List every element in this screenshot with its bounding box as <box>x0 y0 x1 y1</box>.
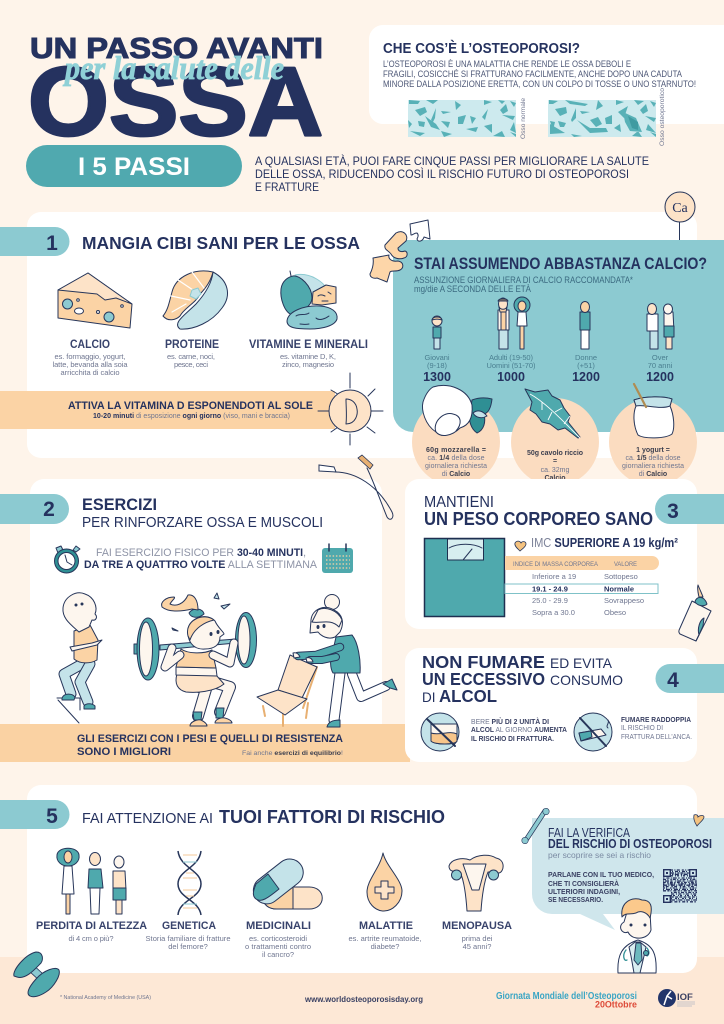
risk factor notes: di 4 cm o più? <box>68 934 114 943</box>
heading: step 3 <box>424 494 653 529</box>
callout: risk check <box>532 818 724 930</box>
calcium food: kale <box>511 389 599 486</box>
intake values: 1200 <box>646 370 674 384</box>
kale fact: = <box>553 458 557 465</box>
BMI table: Sopra a 30.0 <box>532 608 575 617</box>
risk factor notes: 45 anni? <box>463 942 491 951</box>
label: calcio: CALCIO <box>70 339 110 351</box>
intake values: Uomini (51-70) <box>486 361 536 370</box>
intake values <box>423 353 674 384</box>
intake values: Adulti (19-50) <box>489 353 534 362</box>
callout heading: FAI LA VERIFICA <box>548 826 631 840</box>
label: calcio: latte, bevanda alla soia <box>52 360 128 369</box>
icon: calcium circle: Ca <box>672 201 689 216</box>
callout subheading: per scoprire se sei a rischio <box>548 850 651 860</box>
icon: sun with letter D <box>318 373 383 445</box>
BMI table: Obeso <box>604 608 626 617</box>
step number tab 5: 5 <box>46 805 58 828</box>
callout text <box>548 870 654 904</box>
icon: heart <box>515 541 526 551</box>
intake values: (9-18) <box>427 361 448 370</box>
label: proteine: PROTEINE <box>165 339 219 351</box>
icon: blood drop <box>367 853 402 911</box>
panel: step 5 <box>0 785 724 1010</box>
figure: three women shrinking <box>57 848 126 914</box>
label: proteine <box>165 339 219 369</box>
yogurt fact <box>622 447 684 478</box>
risk factor notes: il cancro? <box>262 950 294 959</box>
exercise frequency text: DA TRE A QUATTRO VOLTE ALLA SETTIMANA <box>84 559 318 571</box>
heading: CHE COS’È L’OSTEOPOROSI? <box>383 40 580 57</box>
figure: child <box>432 316 442 349</box>
band: weights and resistance: Fai anche esercizi di equilibrio ! <box>242 750 343 757</box>
label: vitamine e minerali: VITAMINE E MINERALI <box>249 339 368 351</box>
risk factor notes: prima dei <box>462 934 493 943</box>
label: calcio: es. formaggio, yogurt, <box>54 352 126 361</box>
figure: woman lifting barbell <box>134 593 256 726</box>
label: vitamine e minerali <box>249 339 368 369</box>
band: vitamin D: 10-20 minuti di esposizione ogni giorno (viso, mani e braccia) <box>93 413 290 420</box>
icon: calendar <box>322 544 353 573</box>
subheading: recommended intake: mg/die A SECONDA DELLE ETÀ <box>414 284 532 294</box>
definition text <box>383 59 696 89</box>
panel: step 3 <box>405 479 724 629</box>
icon: calcium circle <box>665 192 695 240</box>
kale fact: Calcio <box>544 475 566 482</box>
yogurt fact: giornaliera richiesta <box>622 463 684 470</box>
mozzarella fact: ca. 1/4 della dose <box>428 455 485 462</box>
intro text <box>255 155 649 194</box>
intake values: 70 anni <box>648 361 673 370</box>
BMI table: VALORE <box>614 561 638 568</box>
calcium food: mozzarella <box>412 386 500 486</box>
yogurt fact: 1 yogurt = <box>636 447 670 454</box>
risk factor labels: MALATTIE <box>359 920 413 932</box>
callout text: CHE TI CONSIGLIERÀ <box>548 879 620 888</box>
figure: older woman with chair <box>257 594 397 727</box>
panel: what is osteoporosis <box>369 25 724 137</box>
heading: step 4: UN ECCESSIVO <box>422 669 545 689</box>
heading: step 3: UN PESO CORPOREO SANO <box>424 508 653 529</box>
label: vitamine e minerali: zinco, magnesio <box>282 360 334 369</box>
BMI table: Normale <box>604 584 634 594</box>
heading: step 3: MANTIENI <box>424 494 494 511</box>
QR code <box>663 869 697 903</box>
yogurt fact: di Calcio <box>639 471 667 478</box>
band: vitamin D <box>0 391 335 429</box>
step number tab 1 <box>0 227 70 256</box>
intake values: Donne <box>575 353 597 362</box>
heading: step 2: ESERCIZI <box>82 495 157 514</box>
mozzarella fact: 60g mozzarella = <box>426 447 486 454</box>
banner: I 5 passi: I 5 PASSI <box>78 153 190 181</box>
risk factor notes <box>68 934 493 959</box>
heading: step 4: ED EVITA <box>550 655 613 671</box>
smoking text: FUMARE RADDOPPIA <box>621 717 691 724</box>
panel: step 2 <box>0 479 382 739</box>
figure: woman over 51 <box>580 302 590 349</box>
banner: I 5 passi <box>26 145 242 187</box>
callout text: ULTERIORI INDAGINI, <box>548 887 620 896</box>
icon: uterus <box>449 855 503 911</box>
intake values: 1200 <box>572 370 600 384</box>
icon: cheese <box>58 273 132 328</box>
mozzarella fact: giornaliera richiesta <box>425 463 487 470</box>
icon: DNA <box>178 851 201 915</box>
title: per la salute delle <box>62 51 284 87</box>
heading: step 2 <box>82 495 323 531</box>
heading: step 4: NON FUMARE <box>422 652 545 672</box>
icon: heart small <box>694 815 704 826</box>
event name and date <box>496 990 637 1010</box>
icon: skipping rope <box>319 455 393 519</box>
title: OSSA <box>28 47 323 156</box>
icon: no alcohol <box>421 713 459 751</box>
band: vitamin D: ATTIVA LA VITAMINA D ESPONENDOTI AL SOLE <box>68 400 313 412</box>
heading: step 2: PER RINFORZARE OSSA E MUSCOLI <box>82 514 323 531</box>
figure: older couple <box>647 304 674 349</box>
icon: medicine tube <box>679 585 711 641</box>
risk factor labels <box>36 920 512 932</box>
BMI table: Sottopeso <box>604 572 638 581</box>
label: proteine: es. carne, noci, <box>167 352 215 361</box>
icon: bathroom scale <box>424 538 504 616</box>
mozzarella fact: di Calcio <box>442 471 470 478</box>
risk factor notes: o trattamenti contro <box>245 942 311 951</box>
BMI table: Inferiore a 19 <box>532 572 576 581</box>
intake values: Over <box>652 353 669 362</box>
osteoporotic bone texture <box>548 100 656 137</box>
event name and date: Giornata Mondiale dell’Osteoporosi <box>496 990 637 1002</box>
alcohol text: BERE PIÙ DI 2 UNITÀ DI <box>471 717 549 726</box>
step number tab 2 <box>0 494 69 524</box>
subheading: recommended intake <box>414 275 633 294</box>
heading: step 4: ALCOL <box>439 686 497 706</box>
label: vitamine e minerali: es. vitamine D, K, <box>280 352 336 361</box>
icon: alarm clock <box>54 546 80 573</box>
definition text: L’OSTEOPOROSI È UNA MALATTIA CHE RENDE LE OSSA DEBOLI E <box>383 59 631 69</box>
BMI table: 19.1 - 24.9 <box>532 584 568 594</box>
smoking text: FRATTURA DELL’ANCA. <box>621 734 692 741</box>
heading: step 5 <box>82 806 445 827</box>
risk factor labels: PERDITA DI ALTEZZA <box>36 920 147 932</box>
normal bone texture <box>408 100 516 137</box>
icon: salmon steak <box>163 271 228 329</box>
label: calcio <box>52 339 128 377</box>
heading: step 4 <box>422 652 623 706</box>
risk factor labels: MEDICINALI <box>246 920 311 932</box>
label: osteoporotic bone: Osso osteoporotico <box>659 87 666 146</box>
risk factor notes: es. artrite reumatoide, <box>348 934 422 943</box>
label: calcio: arricchita di calcio <box>60 368 120 377</box>
icon: vitamins and minerals foods <box>281 271 337 329</box>
footnote: * National Academy of Medicine (USA) <box>60 995 151 1001</box>
panel: calcium <box>393 240 724 432</box>
kale fact: 50g cavolo riccio <box>527 450 583 457</box>
alcohol text: ALCOL AL GIORNO AUMENTA <box>471 727 567 734</box>
logo: IOF: IOF <box>677 992 693 1003</box>
band: weights and resistance: SONO I MIGLIORI <box>77 746 171 758</box>
step number tab 3 <box>655 494 724 524</box>
kale fact: ca. 32mg <box>541 467 570 474</box>
heading: step 5: FAI ATTENZIONE AI <box>82 811 213 827</box>
figure: doctor <box>618 899 656 973</box>
heading: step 5: TUOI FATTORI DI RISCHIO <box>219 806 445 827</box>
intake values: (+51) <box>577 361 595 370</box>
step number tab 1: 1 <box>46 232 58 255</box>
label: proteine: pesce, ceci <box>174 360 208 369</box>
kale fact <box>527 450 583 482</box>
subheading: recommended intake: ASSUNZIONE GIORNALIERA DI CALCIO RACCOMANDATA* <box>414 275 633 285</box>
intake values: 1000 <box>497 370 525 384</box>
figure: man stepping up <box>57 593 102 723</box>
figure: adult man <box>498 298 509 349</box>
website: www.worldosteoporosisday.org <box>304 994 423 1004</box>
step number tab 4 <box>656 664 724 693</box>
heading: step 1: MANGIA CIBI SANI PER LE OSSA <box>82 233 360 253</box>
risk factor notes: diabete? <box>371 942 399 951</box>
callout text: SE NECESSARIO. <box>548 895 603 904</box>
BMI table: INDICE DI MASSA CORPOREA <box>513 561 599 568</box>
BMI table: 25.0 - 29.9 <box>532 596 568 605</box>
event name and date: 20Ottobre <box>595 1000 637 1010</box>
exercise frequency text: FAI ESERCIZIO FISICO PER 30-40 MINUTI, <box>96 547 306 559</box>
panel: step 4 <box>405 648 724 762</box>
risk factor notes: es. corticosteroidi <box>249 934 307 943</box>
heading: step 4: CONSUMO <box>550 672 623 688</box>
mozzarella fact <box>425 447 487 478</box>
intro text: A QUALSIASI ETÀ, PUOI FARE CINQUE PASSI PER MIGLIORARE LA SALUTE <box>255 155 649 168</box>
yogurt fact: ca. 1/5 della dose <box>626 455 681 462</box>
icon: broken bone pieces <box>370 220 430 282</box>
title: UN PASSO AVANTI <box>30 33 323 65</box>
icon: bone <box>522 808 549 844</box>
intro text: E FRATTURE <box>255 182 319 194</box>
BMI target: IMC SUPERIORE A 19 kg/m² <box>531 535 679 550</box>
smoking text <box>621 717 692 741</box>
alcohol text: IL RISCHIO DI FRATTURA. <box>471 736 554 743</box>
logo: IOF <box>658 989 695 1007</box>
intake values: 1300 <box>423 370 451 384</box>
step number tab 2: 2 <box>43 498 55 521</box>
figure: adult woman <box>514 297 530 349</box>
step number tab 3: 3 <box>667 500 679 523</box>
risk factor labels: GENETICA <box>162 920 216 932</box>
smoking text: IL RISCHIO DI <box>621 725 663 732</box>
icon: dumbbell <box>14 952 59 997</box>
alcohol text <box>471 717 567 743</box>
risk factor labels: MENOPAUSA <box>442 920 512 932</box>
definition text: FRAGILI, COSICCHÉ SI FRATTURANO FACILMENTE, ANCHE DOPO UNA CADUTA <box>383 69 682 79</box>
callout text: PARLANE CON IL TUO MEDICO, <box>548 870 654 879</box>
label: normal bone: Osso normale <box>520 97 527 139</box>
panel: step 1 <box>0 192 697 458</box>
calcium food: yogurt <box>609 384 697 486</box>
step number tab 5 <box>0 800 70 829</box>
BMI table <box>505 556 659 617</box>
band: weights and resistance <box>0 724 410 762</box>
step number tab 4: 4 <box>667 669 679 692</box>
icon: pills <box>248 854 322 909</box>
risk factor notes: del femore? <box>168 942 208 951</box>
callout heading <box>548 826 712 851</box>
heading: step 4: DI <box>422 690 436 705</box>
intake values: Giovani <box>424 353 450 362</box>
intro text: DELLE OSSA, RIDUCENDO COSÌ IL RISCHIO FUTURO DI OSTEOPOROSI <box>255 168 629 181</box>
BMI table: Sovrappeso <box>604 596 644 605</box>
band: weights and resistance: GLI ESERCIZI CON I PESI E QUELLI DI RESISTENZA <box>77 733 343 745</box>
risk factor notes: Storia familiare di fratture <box>146 934 230 943</box>
icon: no smoking <box>574 713 612 751</box>
exercise frequency text <box>84 547 318 571</box>
